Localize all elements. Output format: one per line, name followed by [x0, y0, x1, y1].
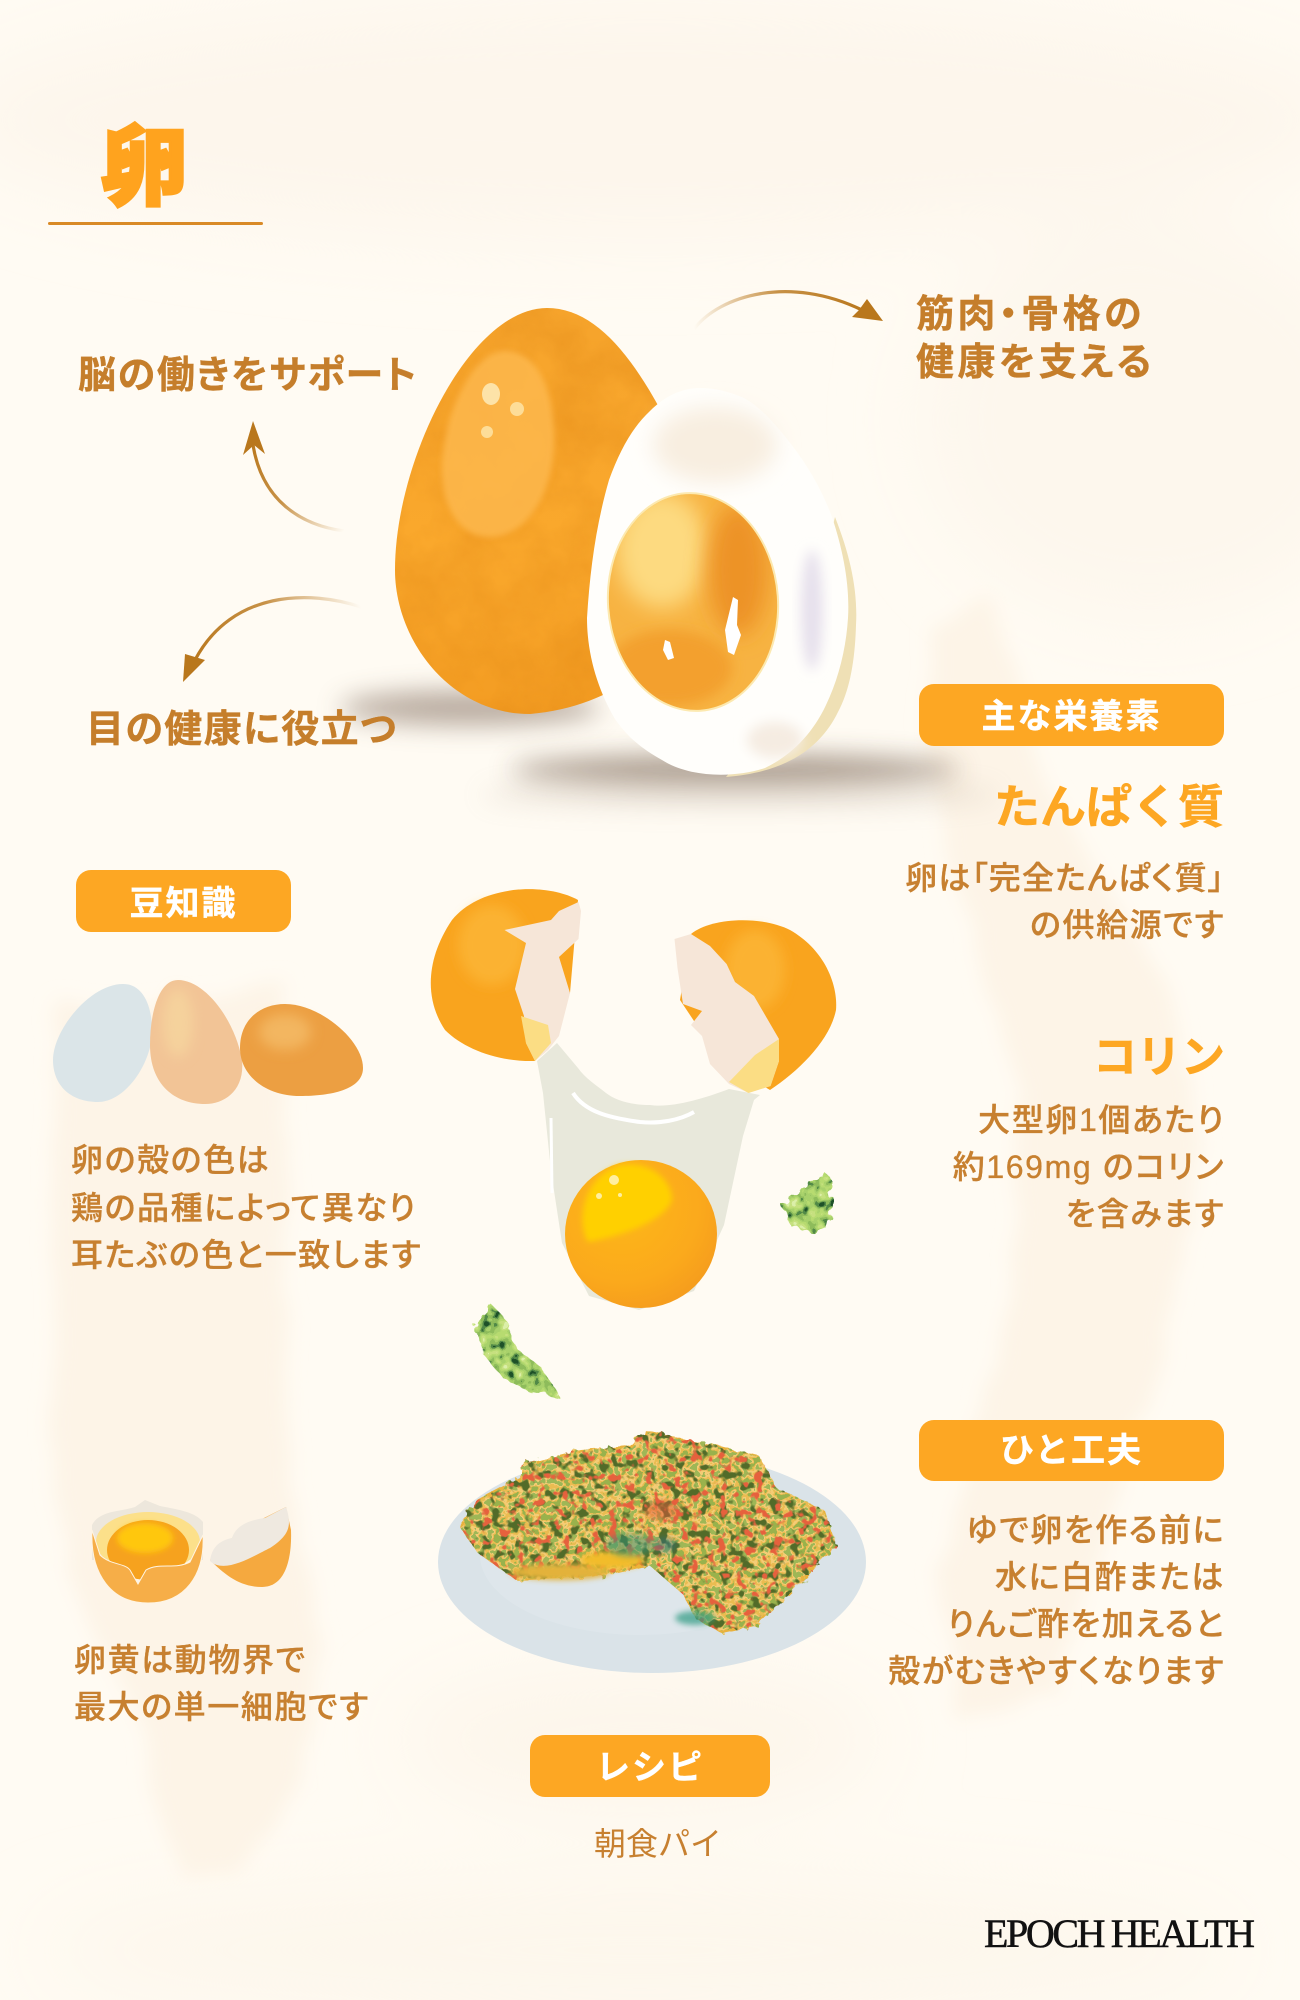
- tip text: りんご酢を加えると: [947, 1606, 1225, 1642]
- nutrient text: choline: 約169mg のコリン: [953, 1149, 1225, 1185]
- icon: halved boiled egg: [587, 388, 856, 777]
- icon: three shell-colour eggs: [53, 980, 363, 1104]
- pill heading: main nutrients: [919, 684, 1224, 746]
- icon: cracked egg with yolk: [431, 889, 836, 1310]
- pill heading: recipe: [530, 1735, 770, 1797]
- trivia text: shell colour: 卵の殻の色は: [71, 1142, 270, 1178]
- trivia text: yolk: [74, 1642, 370, 1725]
- icon: eggshell piece: [210, 1507, 291, 1587]
- egg shadows: [340, 691, 1000, 807]
- label: muscle and bone: 健康を支える: [916, 342, 1155, 384]
- plate: [438, 1451, 866, 1673]
- pill heading: recipe: レシピ: [596, 1749, 704, 1787]
- icon: plate with breakfast pie: [438, 1431, 866, 1673]
- arrow: right to muscle label: [694, 292, 883, 329]
- nutrient text: protein: 卵は「完全たんぱく質」: [905, 860, 1225, 896]
- label: eyes: 目の健康に役立つ: [86, 709, 397, 751]
- pill heading: tip: [919, 1420, 1224, 1481]
- yolk: [565, 1160, 717, 1308]
- label: brain: 脳の働きをサポート: [78, 355, 418, 397]
- nutrient text: protein: [905, 860, 1225, 943]
- title underline: [48, 222, 263, 225]
- pill heading: main nutrients: 主な栄養素: [982, 698, 1162, 736]
- arrow: up to brain label: [243, 421, 344, 531]
- nutrient text: choline: [953, 1102, 1225, 1232]
- nutrient heading: choline: コリン: [1093, 1033, 1225, 1082]
- yolk: [606, 492, 780, 712]
- trivia text: shell colour: 鶏の品種によって異なり: [71, 1190, 417, 1226]
- tip text: [888, 1512, 1225, 1689]
- tip text: 殻がむきやすくなります: [888, 1653, 1225, 1689]
- recipe name: 朝食パイ: [594, 1826, 722, 1862]
- logo: Epoch Health: EPOCH HEALTH: [984, 1911, 1253, 1956]
- title: 卵: [100, 118, 188, 217]
- label: muscle and bone: [916, 294, 1155, 384]
- icon: whole orange egg: [395, 308, 698, 714]
- pill heading: trivia: 豆知識: [130, 885, 238, 923]
- left shell: [431, 889, 578, 1061]
- tip text: ゆで卵を作る前に: [967, 1512, 1225, 1548]
- nutrient text: protein: の供給源です: [1030, 907, 1225, 943]
- icon: cracked egg bowl with yolk: [92, 1500, 203, 1603]
- icon: spinach leaf right: [782, 1173, 831, 1234]
- icon: spinach leaf lower: [476, 1303, 560, 1398]
- right shell: [680, 920, 836, 1090]
- egg white: [537, 1043, 760, 1310]
- label: muscle and bone: 筋肉・骨格の: [916, 294, 1145, 336]
- trivia text: yolk: 卵黄は動物界で: [74, 1642, 307, 1678]
- pill heading: tip: ひと工夫: [1000, 1432, 1143, 1470]
- nutrient text: choline: 大型卵1個あたり: [978, 1102, 1225, 1138]
- trivia text: shell colour: [71, 1142, 422, 1273]
- tip text: 水に白酢または: [995, 1559, 1225, 1595]
- pill heading: trivia: [76, 870, 291, 932]
- trivia text: shell colour: 耳たぶの色と一致します: [71, 1237, 422, 1273]
- pie: [459, 1431, 836, 1633]
- arrow: down to eye label: [183, 598, 361, 682]
- illustration layer: [53, 290, 972, 1673]
- nutrient heading: protein: たんぱく質: [994, 781, 1224, 833]
- nutrient text: choline: を含みます: [1066, 1196, 1225, 1232]
- trivia text: yolk: 最大の単一細胞です: [74, 1689, 370, 1725]
